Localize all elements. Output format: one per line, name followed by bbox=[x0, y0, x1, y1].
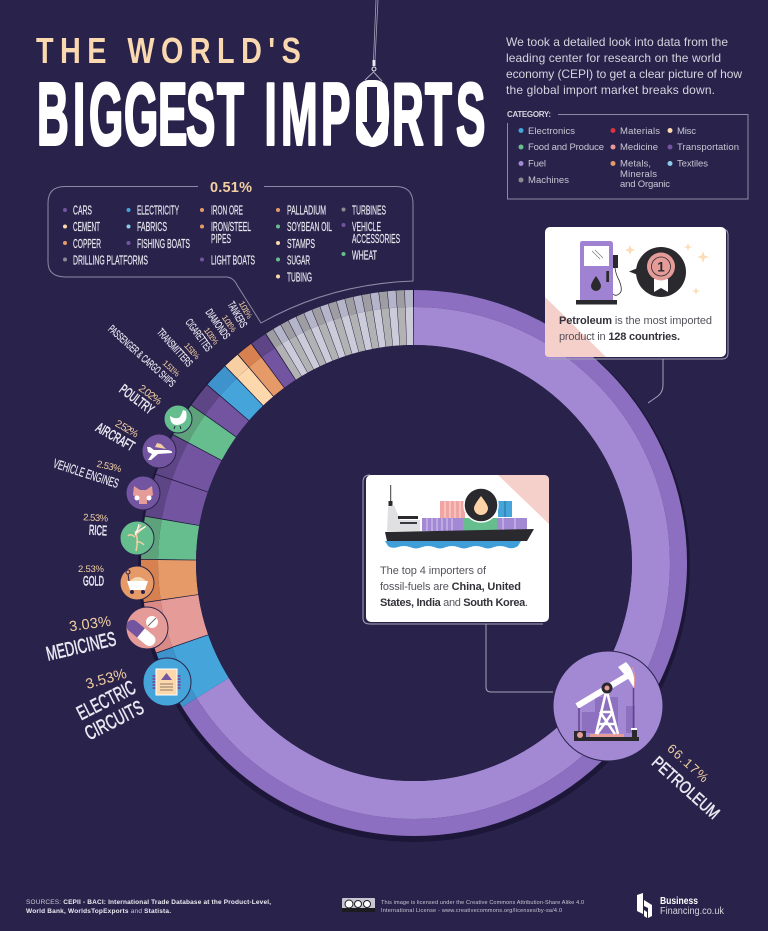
logo: Business Financing: Business bbox=[660, 896, 698, 907]
license text: This image is licensed under the Creative Commons Attribution-Share Alike 4.0 bbox=[381, 900, 584, 906]
label: passenger and cargo ships bbox=[105, 316, 184, 390]
icon: number one medal: 1 bbox=[657, 260, 665, 274]
list: 0.51% products: STAMPS bbox=[287, 237, 315, 251]
list: 0.51% products: SUGAR bbox=[287, 254, 310, 268]
label: tankers: 1.01% bbox=[237, 299, 255, 321]
label: transmitters bbox=[154, 320, 203, 370]
label: passenger and cargo ships: PASSENGER & CARGO SHIPS bbox=[105, 323, 177, 390]
label: gold: GOLD bbox=[83, 572, 104, 588]
segments: 0.51% grey slices bbox=[150, 298, 678, 828]
label: electric circuits: CIRCUITS bbox=[81, 697, 148, 745]
list: 0.51% products: FABRICS bbox=[137, 220, 167, 234]
label: electric circuits: ELECTRIC bbox=[73, 677, 140, 725]
text: petroleum fact: Petroleum is the most imported bbox=[559, 315, 712, 327]
logo: Business Financing bbox=[637, 893, 725, 918]
label: aircraft: 2.52% bbox=[113, 418, 141, 441]
label: medicines bbox=[44, 614, 118, 666]
list: 0.51% products: VEHICLE bbox=[352, 220, 381, 234]
title: Biggest Imports: BIGGEST IMPORTS bbox=[37, 65, 485, 163]
sources: SOURCES: CEPII - BACI: International Trade Database at the Product-Level, bbox=[26, 899, 271, 906]
list: 0.51% products: TUBING bbox=[287, 270, 312, 284]
icon: medicines bbox=[124, 607, 168, 649]
list: 0.51% products: PIPES bbox=[211, 232, 231, 246]
text: fossil fuel importers: fossil-fuels are China, United bbox=[380, 581, 521, 593]
segment: poultry bbox=[150, 298, 678, 828]
legend: category: Metals, bbox=[620, 158, 651, 170]
label: electric circuits bbox=[73, 666, 148, 745]
intro text: We took a detailed look into data from the bbox=[506, 35, 728, 49]
label: diamonds: 1.01% bbox=[220, 313, 239, 334]
icon: oil pump bbox=[553, 651, 663, 761]
text: fossil fuel importers bbox=[380, 565, 528, 609]
legend: category: Medicine bbox=[620, 142, 658, 153]
label: gold: 2.53% bbox=[78, 564, 105, 575]
label: medicines: 3.03% bbox=[68, 614, 112, 635]
segment: tankers bbox=[150, 298, 678, 828]
legend: category: Textiles bbox=[677, 158, 708, 170]
legend: category: Fuel bbox=[528, 158, 546, 170]
label: vehicle engines: 2.53% bbox=[96, 459, 123, 475]
legend: category: and Organic bbox=[620, 179, 670, 190]
list: 0.51% products: DRILLING PLATFORMS bbox=[73, 254, 148, 268]
intro text: economy (CEPI) to get a clear picture of how bbox=[506, 67, 742, 81]
segment: passenger and cargo ships bbox=[150, 298, 678, 828]
segment: transmitters bbox=[150, 298, 678, 828]
intro text bbox=[506, 35, 742, 97]
legend: category bbox=[507, 110, 748, 199]
icon: aircraft bbox=[142, 434, 176, 468]
label: aircraft bbox=[93, 410, 143, 454]
text: petroleum fact bbox=[559, 315, 712, 343]
subtitle: The World's: THE WORLD'S bbox=[36, 30, 301, 71]
icon: fuel pump bbox=[576, 241, 621, 304]
segment: electric circuits bbox=[150, 298, 678, 828]
list: 0.51% products: CEMENT bbox=[73, 220, 100, 234]
icon: rice bbox=[120, 521, 154, 555]
label: passenger and cargo ships: 1.51% bbox=[161, 358, 182, 379]
segment: cigarettes bbox=[150, 298, 678, 828]
label: vehicle engines: VEHICLE ENGINES bbox=[51, 456, 121, 491]
license text bbox=[381, 900, 584, 914]
heading: 0.51%: 0.51% bbox=[210, 180, 252, 196]
list: 0.51% products bbox=[63, 204, 400, 284]
label: rice: 2.53% bbox=[83, 512, 109, 525]
list: 0.51% products: TURBINES bbox=[352, 204, 386, 218]
label: diamonds bbox=[203, 302, 240, 342]
icon: engine bbox=[126, 476, 160, 510]
list: 0.51% products: ELECTRICITY bbox=[137, 204, 179, 218]
icon: crane hook bbox=[365, 0, 382, 81]
label: rice: RICE bbox=[89, 522, 107, 538]
segment: gold bbox=[150, 298, 678, 828]
segment: petroleum bbox=[150, 298, 678, 828]
intro text: leading center for research on the world bbox=[506, 51, 721, 65]
segment: aircraft bbox=[150, 298, 678, 828]
icons: sparkles bbox=[625, 243, 709, 295]
label: medicines: MEDICINES bbox=[44, 628, 118, 666]
legend: category: Minerals bbox=[620, 169, 657, 180]
sources: World Bank, WorldsTopExports and Statista. bbox=[26, 908, 171, 915]
list: 0.51% products: COPPER bbox=[73, 237, 101, 251]
label: tankers: TANKERS bbox=[225, 300, 249, 330]
list: 0.51% products: FISHING BOATS bbox=[137, 237, 190, 251]
list: 0.51% products: WHEAT bbox=[352, 248, 377, 262]
callout: petroleum most imported bbox=[545, 227, 728, 403]
icon: cargo ship bbox=[385, 485, 534, 548]
list: 0.51% products: CARS bbox=[73, 204, 92, 218]
list: 0.51% products: LIGHT BOATS bbox=[211, 254, 255, 268]
label: diamonds: DIAMONDS bbox=[203, 307, 232, 342]
logo: Business Financing: Financing.co.uk bbox=[660, 906, 725, 917]
label: poultry bbox=[117, 374, 164, 418]
label: rice bbox=[82, 512, 109, 539]
donut chart bbox=[150, 298, 678, 828]
list: 0.51% products: ACCESSORIES bbox=[352, 232, 400, 246]
ring shadow bbox=[138, 290, 690, 842]
label: cigarettes bbox=[183, 312, 222, 354]
label: petroleum bbox=[648, 741, 723, 823]
legend: category: Misc bbox=[677, 126, 696, 137]
label: poultry: POULTRY bbox=[117, 381, 158, 417]
segment: rice bbox=[150, 298, 678, 828]
text: petroleum fact: product in 128 countries. bbox=[559, 331, 680, 343]
legend: category: Food and Produce bbox=[528, 142, 604, 153]
list: 0.51% products: PALLADIUM bbox=[287, 204, 326, 218]
text: fossil fuel importers: The top 4 importers of bbox=[380, 565, 487, 577]
callout: top fossil fuel importers bbox=[363, 475, 553, 692]
icon: gold cart bbox=[120, 566, 154, 600]
label: transmitters: TRANSMITTERS bbox=[154, 327, 195, 370]
legend: category: Materials bbox=[620, 126, 660, 137]
label: gold bbox=[78, 564, 105, 588]
legend: category: CATEGORY: bbox=[507, 110, 551, 119]
icon: poultry bbox=[164, 405, 192, 433]
label: poultry: 2.02% bbox=[136, 382, 164, 408]
segment: vehicle engines bbox=[150, 298, 678, 828]
segment: medicines bbox=[150, 298, 678, 828]
label: petroleum: PETROLEUM bbox=[648, 753, 723, 823]
label: vehicle engines bbox=[51, 444, 125, 491]
callout frame: 0.51% group bbox=[48, 186, 413, 323]
icon: number one medal bbox=[629, 247, 686, 297]
icon: electric circuit bbox=[143, 658, 191, 706]
list: 0.51% products: SOYBEAN OIL bbox=[287, 220, 332, 234]
legend: category: Transportation bbox=[677, 142, 739, 153]
legend: category: Electronics bbox=[528, 126, 575, 137]
label: transmitters: 1.51% bbox=[182, 340, 203, 362]
label: petroleum: 66.17% bbox=[664, 741, 712, 786]
legend: category: Machines bbox=[528, 175, 569, 186]
label: tankers bbox=[225, 295, 257, 330]
sources bbox=[26, 899, 271, 915]
label: aircraft: AIRCRAFT bbox=[93, 419, 138, 454]
label: cigarettes: CIGARETTES bbox=[183, 317, 214, 354]
license text: International License - www.creativecommons.org/licenses/by-sa/4.0 bbox=[381, 908, 562, 914]
label: electric circuits: 3.53% bbox=[84, 666, 129, 693]
segment: diamonds bbox=[150, 298, 678, 828]
donut hole bbox=[196, 345, 632, 781]
list: 0.51% products: IRON ORE bbox=[211, 204, 243, 218]
icon: creative commons badge bbox=[342, 898, 375, 912]
text: fossil fuel importers: States, India and South Korea. bbox=[380, 597, 528, 609]
label: cigarettes: 1.01% bbox=[202, 325, 221, 347]
intro text: the global import market breaks down. bbox=[506, 83, 715, 97]
list: 0.51% products: IRON/STEEL bbox=[211, 220, 251, 234]
